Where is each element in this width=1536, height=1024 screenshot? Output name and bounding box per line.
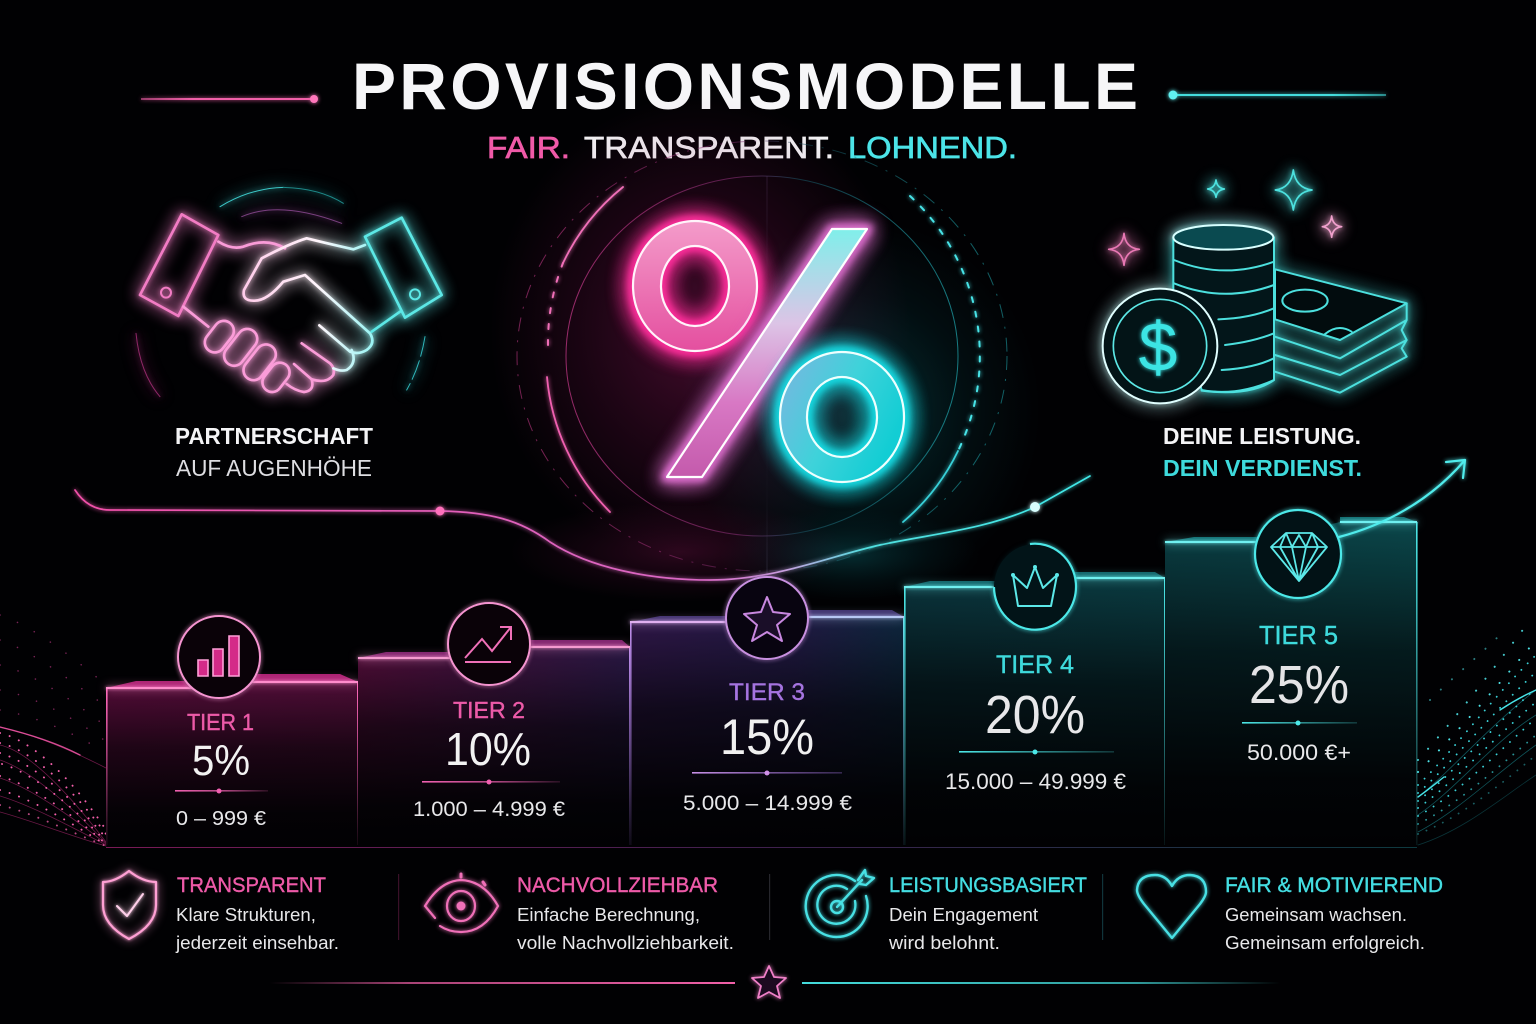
benefit: nachvollziehbar [425,874,734,953]
left hand [183,242,334,396]
caption: Partnerschaft: PARTNERSCHAFT [175,423,373,449]
tier 3 step: TIER 3 [729,679,805,706]
subtitle: LOHNEND. [848,130,1017,165]
tier 3 step: 15% [720,709,814,765]
tier 1 step: 5% [192,737,250,785]
caption: Deine Leistung [1163,423,1362,481]
icon: eye [425,874,498,932]
benefit: leistungsbasiert: wird belohnt. [888,932,1000,953]
benefit: fair und motivierend: Gemeinsam erfolgreich. [1225,932,1425,953]
tier 2 step: 10% [445,723,531,775]
caption: Deine Leistung: DEINE LEISTUNG. [1163,423,1361,449]
subtitle: TRANSPARENT. [584,130,834,165]
tier 4 badge [994,544,1076,630]
tier 5 badge [1255,510,1341,598]
benefit: nachvollziehbar: volle Nachvollziehbarkeit. [517,932,734,953]
tier 4 step [904,544,1166,845]
tier 3 step [630,577,905,845]
right hand [244,238,400,371]
benefit: fair und motivierend: FAIR & MOTIVIEREND [1225,874,1443,897]
title: PROVISIONSMODELLE [352,49,1138,123]
coin stack [1173,225,1274,392]
percent: slash [667,229,867,477]
tier 2 step: 1.000 – 4.999 € [413,798,565,821]
tier 5 step [1165,510,1418,845]
tier 3 badge [726,577,808,659]
icon: target [806,870,874,937]
icon: heart [1137,875,1206,938]
title accent line: cyan [1168,90,1386,100]
tier 5 step: 25% [1249,655,1349,715]
tier 4 step: TIER 4 [996,651,1074,679]
left cuff [140,214,218,316]
tier 3 step: 5.000 – 14.999 € [683,792,852,815]
icon: handshake [136,187,442,397]
icon: coin stack and banknotes [1103,170,1407,403]
benefit: leistungsbasiert: Dein Engagement [889,904,1038,925]
benefit: leistungsbasiert [806,870,1087,953]
title accent line: pink [141,95,318,103]
arrow: growth continues [1339,460,1465,537]
footer divider with star [270,966,1280,998]
benefit: transparent: TRANSPARENT [177,874,326,897]
benefit: transparent: jederzeit einsehbar. [175,932,339,953]
tier steps [106,510,1418,848]
icon: dollar sign: $ [1139,308,1177,386]
background particle field: pink waves [0,615,106,846]
banknotes [1275,269,1407,393]
tier 5 step: TIER 5 [1259,620,1338,650]
icon: shield [103,871,156,939]
tier 4 step: 20% [985,685,1085,745]
tier 1 step: 0 – 999 € [176,808,266,830]
tier 5 step: 50.000 €+ [1247,740,1351,765]
base line [106,847,1417,848]
subtitle: FAIR. [487,130,570,165]
tier 2 badge [448,603,530,685]
tier 4 step: 15.000 – 49.999 € [945,769,1126,794]
benefit: transparent: Klare Strukturen, [176,904,316,925]
right cuff [365,218,442,318]
subtitle [487,130,1017,165]
icon: central percent symbol with rings [490,95,1040,602]
benefit: transparent [103,871,339,953]
caption: Partnerschaft: AUF AUGENHÖHE [176,455,372,481]
growth curve [75,476,1090,580]
tier 1 step: TIER 1 [187,709,254,735]
benefit: leistungsbasiert: LEISTUNGSBASIERT [889,874,1087,897]
icon: footer star [752,966,786,998]
background particle field: cyan waves [1418,623,1536,845]
tier 1 badge [178,616,260,698]
sparkles [1109,170,1342,265]
dollar coin [1103,289,1217,403]
tier 2 step [358,603,631,845]
caption: Deine Leistung: DEIN VERDIENST. [1163,455,1362,481]
percent: bottom ring [780,352,904,482]
benefit: fair und motivierend: Gemeinsam wachsen. [1225,904,1407,925]
tier 1 step [106,616,359,845]
caption: Partnerschaft [175,423,373,481]
benefit: nachvollziehbar: Einfache Berechnung, [517,904,700,925]
tier 2 step: TIER 2 [453,697,525,723]
percent: top ring [633,221,757,351]
benefit: fair und motivierend [1137,874,1443,953]
benefit: nachvollziehbar: NACHVOLLZIEHBAR [517,874,718,897]
surrounding arcs [136,187,425,397]
